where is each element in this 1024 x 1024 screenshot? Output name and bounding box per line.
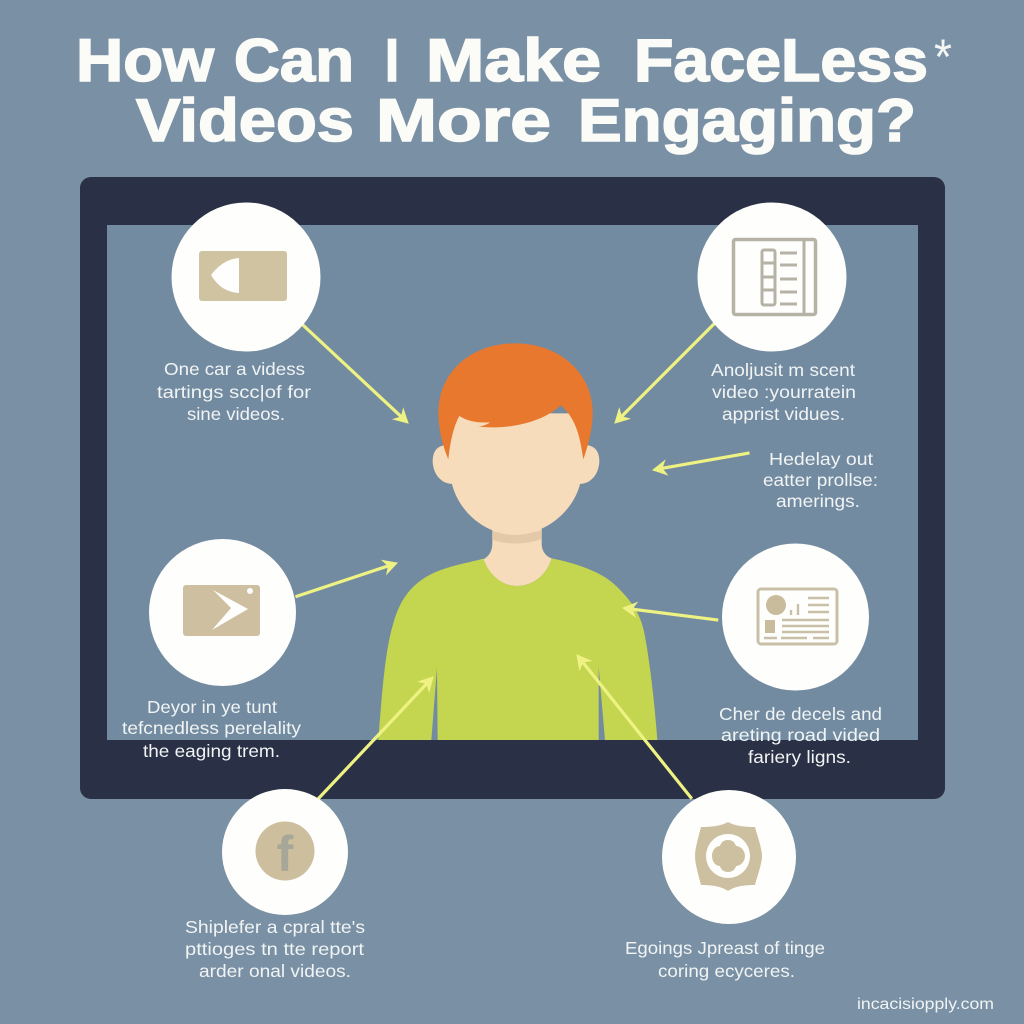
text block: bottom left: Shiplefer a cpral tte's [185, 917, 365, 937]
title [76, 27, 952, 154]
text block: bottom left: pttioges tn tte report [185, 939, 364, 959]
title: Engaging? [578, 87, 916, 154]
text block: top left [157, 359, 311, 424]
faceless person [378, 343, 657, 740]
arrow: bottom right [572, 651, 697, 803]
text block: right upper: amerings. [776, 491, 860, 511]
text block: top right: apprist vidues. [722, 404, 845, 424]
text block: bottom right [625, 938, 825, 981]
icon circle: video back [172, 202, 320, 352]
title: FaceLess [634, 27, 928, 94]
panel: video frame [80, 177, 945, 799]
text block: top left: sine videos. [187, 404, 285, 424]
text block: top left: tartings scc|of for [157, 382, 311, 402]
title: * [934, 29, 952, 85]
icon circle: document list [698, 202, 846, 352]
text block: left middle [122, 697, 301, 761]
text block: right middle [719, 704, 882, 767]
arrow: left middle [293, 556, 399, 603]
text block: right middle: fariery ligns. [748, 747, 851, 767]
title: How [76, 27, 214, 94]
text block: bottom left: arder onal videos. [199, 961, 351, 981]
watermark: incacisiopply.com [857, 996, 994, 1013]
icon circle: dashboard card [722, 544, 869, 690]
text block: right middle: areting road vided [721, 725, 880, 745]
arrow: right middle [622, 601, 719, 627]
title: More [376, 87, 551, 154]
text block: top right: Anoljusit m scent [711, 360, 855, 380]
arrow: top left [297, 319, 413, 428]
icon circle: play chevron [149, 539, 296, 686]
text block: bottom right: coring ecyceres. [658, 961, 795, 981]
text block: right upper: Hedelay out [769, 449, 873, 469]
icon circle: badge [662, 790, 796, 924]
arrow: right upper [652, 446, 751, 477]
text block: left middle: the eaging trem. [143, 741, 280, 761]
arrow: top right [610, 318, 720, 428]
text block: top right: video :yourratein [712, 382, 856, 402]
text block: right middle: Cher de decels and [719, 704, 882, 724]
arrow: bottom left [313, 672, 438, 804]
text block: right upper: eatter prollse: [763, 470, 878, 490]
text block: bottom left [185, 917, 365, 981]
title: I [385, 27, 399, 94]
title: Videos [136, 87, 354, 154]
icon circle: social f: f [277, 826, 294, 882]
title: Make [426, 27, 601, 94]
text block: left middle: tefcnedless perelality [122, 718, 301, 738]
title: Can [234, 27, 354, 94]
text block: right upper [763, 449, 878, 511]
text block: left middle: Deyor in ye tunt [147, 697, 277, 717]
text block: top left: One car a videss [164, 359, 305, 379]
text block: bottom right: Egoings Jpreast of tinge [625, 938, 825, 958]
icon circle: social f [222, 789, 348, 915]
text block: top right [711, 360, 856, 424]
